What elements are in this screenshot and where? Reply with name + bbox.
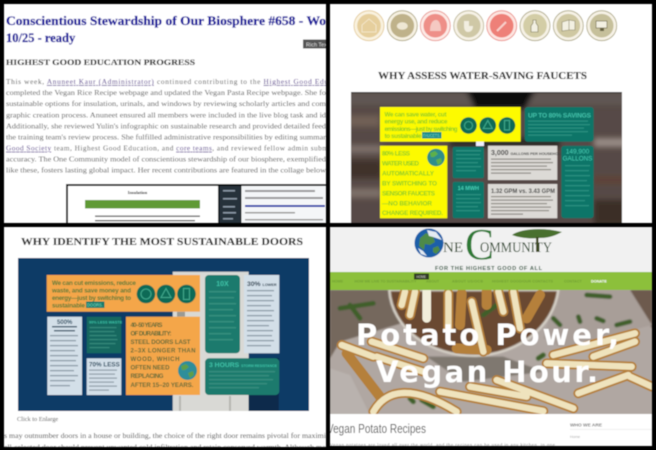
heading: WHY ASSESS WATER-SAVING FAUCETS [378, 71, 587, 82]
90% less waste box [87, 317, 123, 353]
site header band [330, 227, 652, 272]
3 hours stat box [205, 358, 279, 395]
faucet photo background [340, 88, 635, 225]
body paragraph [6, 77, 328, 175]
body paragraph: completed the Vegan Rice Recipe webpage and updated the Vegan Pasta Recipe webpage. She fo [6, 88, 326, 97]
One Community logo: NE [443, 240, 463, 256]
navigation bar: HOME [332, 280, 344, 284]
orange headline box: DOORS. [87, 303, 103, 309]
doors infographic [18, 258, 309, 411]
500% better sound insulation box: 500% [57, 320, 73, 326]
teal stat box: water [453, 147, 484, 178]
orange headline box: waste, and save money and [51, 288, 131, 294]
hero title [356, 318, 619, 389]
panel: water-saving faucets [329, 3, 653, 224]
body paragraph: Additionally, she reviewed Yulin's infographic on sustainable research and provided detailed feed [6, 121, 326, 130]
yellow headline box: to sustainable [384, 133, 422, 140]
70% less box: 70% LESS [89, 362, 120, 368]
teal stat box: 14 mWh [453, 182, 484, 218]
yellow headline box: emissions—just by switching [384, 126, 458, 133]
heading: WHY IDENTIFY THE MOST SUSTAINABLE DOORS [21, 237, 303, 248]
yellow headline box: energy use, and reduce [384, 119, 448, 126]
collage image: Insulation [128, 190, 148, 195]
10X stat box [205, 275, 240, 353]
gray stat box: 1.32 GPM vs 3.43 GPM [488, 184, 557, 218]
intro line: Vegan potatoes are loved all over the world, and the recipes can be used in any kitchen. In one [330, 442, 556, 448]
navigation bar: HIGHEST GOOD/OUR CONTACTS [492, 280, 554, 284]
up to 80% savings box [525, 107, 594, 142]
teal stat box: 149,900 gallons [561, 146, 594, 218]
yellow headline box: We can save water, cut [384, 112, 446, 118]
hero photo of potato fries [330, 290, 652, 415]
40-50 years durability callout: AFTER 15–20 YEARS. [130, 382, 194, 389]
body text: s may outnumber doors in a house or building, the choice of the right door remains pivotal for maximi [4, 431, 326, 440]
hero title: Vegan Hour. [376, 355, 598, 389]
3 hours stat box: 3 HOURS STORM RESISTANCE [209, 362, 278, 369]
faucet infographic [340, 88, 635, 225]
gray stat box: 3,000 gallons: 3,000 GALLONS PER HOUSEHOLD [491, 150, 563, 157]
post title: 10/25 - ready [6, 31, 76, 45]
40-50 years durability callout: 2–3X LONGER THAN [130, 348, 196, 354]
teal stat box: 149,900 gallons: 149,900 [566, 148, 590, 156]
panel: conscientious stewardship blog post [3, 3, 329, 224]
10X stat box: 10X [216, 281, 229, 288]
40-50 years durability callout: OFTEN NEED [130, 364, 170, 372]
90% less waste box: 90% LESS WASTE [89, 320, 123, 324]
orange headline box: energy—just by switching to [52, 295, 131, 302]
40-50 years durability callout: STEEL DOORS LAST [130, 339, 191, 346]
panel: sustainable doors [3, 226, 327, 450]
gray stat box: 3,000 gallons [488, 146, 563, 180]
teal stat box: 14 mWh: 14 MWH [458, 186, 479, 192]
80% less water callout: —NO BEHAVIOR [382, 200, 432, 207]
yellow headline box: FAUCETS. [423, 133, 440, 138]
30% lower stat box: 30% LOWER [247, 281, 277, 288]
page title: Vegan Potato Recipes [327, 421, 426, 436]
80% less water callout: WATER USED [382, 160, 419, 168]
40-50 years durability callout: REPLACING [130, 373, 164, 380]
sidebar heading: Home [570, 435, 580, 439]
icons: recycle, triangle, bottle [137, 285, 196, 303]
yellow headline box [380, 107, 521, 142]
body paragraph: the training team's review process. She fulfilled administrative responsibilities by editing summar [6, 132, 327, 141]
navigation bar: ABOUT US/OCB [452, 280, 483, 284]
80% less water callout: AUTOMATICALLY [382, 170, 435, 178]
panel: vegan potato recipes webpage [327, 220, 653, 448]
80% less water callout: CHANGE REQUIRED. [382, 210, 443, 217]
collage image [66, 184, 328, 225]
row of badge icons [354, 11, 617, 41]
sidebar heading [570, 422, 652, 439]
rich text button [303, 40, 329, 48]
orange headline box: We can cut emissions, reduce [52, 280, 137, 287]
navigation bar: HOW WE LIVE TO SUSTAINABILITY [354, 280, 417, 284]
up to 80% savings box: UP TO 80% SAVINGS [528, 112, 592, 120]
navigation bar: DONATE [591, 280, 607, 284]
navigation bar: CONTACT [564, 280, 582, 284]
orange headline box [47, 275, 200, 312]
One Community logo: OMMUNITY [480, 240, 552, 256]
body paragraph: sustainable options for insulation, urinals, and windows by reviewing scholarly articles and com [6, 99, 326, 108]
navigation bar: ABOUT [426, 280, 440, 284]
orange headline box: sustainable [52, 302, 86, 310]
80% less water callout: 80% LESS [382, 150, 411, 158]
30% lower stat box [244, 275, 279, 353]
body text [4, 431, 326, 450]
gray stat box: 1.32 GPM vs 3.43 GPM: 1.32 GPM vs. 3.43 GPM [491, 188, 555, 195]
tagline: FOR THE HIGHEST GOOD OF ALL [435, 266, 543, 272]
caption: Click to Enlarge [17, 416, 58, 423]
icons: recycle, triangle, bottle [460, 117, 515, 134]
40-50 years durability callout: OF DURABILITY: [130, 330, 172, 338]
sidebar heading: WHO WE ARE [570, 422, 603, 428]
40-50 years durability callout [126, 317, 200, 395]
80% less water callout [380, 146, 447, 218]
hero title: Potato Power, [356, 318, 619, 352]
post title [6, 14, 326, 45]
80% less water callout: SENSOR FAUCETS [382, 190, 436, 197]
navigation bar: HOME [416, 275, 426, 279]
post title: Conscientious Stewardship of Our Biosphere #658 - Wo [6, 14, 326, 28]
rich text button: Rich Text [306, 42, 329, 48]
40-50 years durability callout: 40–50 YEARS [130, 322, 162, 329]
navigation bar [330, 272, 652, 290]
body paragraph: accuracy. The One Community model of conscientious stewardship of our biosphere, exemplified [6, 155, 326, 164]
One Community logo [414, 220, 562, 272]
70% less box [87, 358, 121, 395]
door illustration [173, 272, 279, 411]
body paragraph: like these, fosters lasting global impact. Her recent contributions are featured in the collage below [6, 166, 327, 175]
80% less water callout: BY SWITCHING TO [382, 180, 437, 187]
icon: earth [414, 228, 444, 258]
icon: globe [427, 149, 445, 166]
40-50 years durability callout: WOOD, WHICH [130, 356, 180, 363]
section heading: HIGHEST GOOD EDUCATION PROGRESS [6, 57, 195, 67]
body paragraph: graphic creation process. Anuneet ensured all members were included in the live blog task and id [6, 110, 326, 119]
body paragraph: This week, Anuneet Kaur (Administrator) continued contributing to the Highest Good Edu [6, 77, 328, 86]
teal stat box: 149,900 gallons: GALLONS [563, 156, 592, 162]
500% better sound insulation box [47, 317, 82, 395]
One Community logo: C [465, 220, 494, 269]
body paragraph: Good Society team, Highest Good Education, and core teams, and reviewed fellow admin subm [6, 144, 328, 153]
icon: acacia tree [512, 229, 562, 252]
icon: globe [178, 361, 197, 380]
